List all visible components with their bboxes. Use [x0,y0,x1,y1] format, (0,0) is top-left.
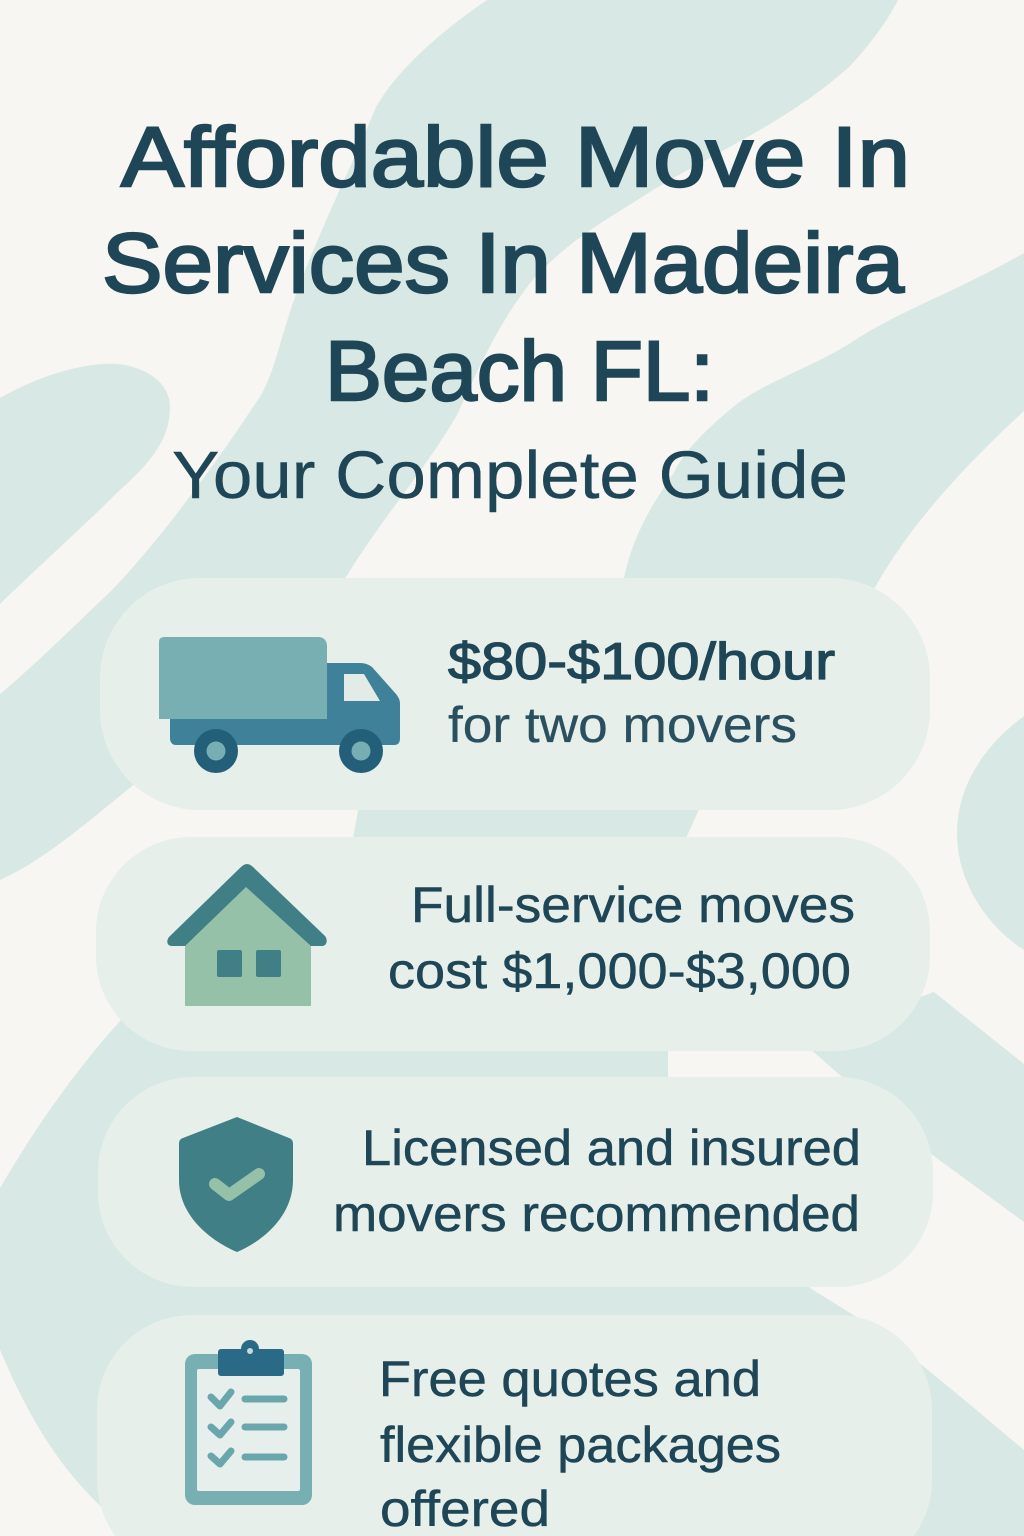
panel: free quotes [97,1315,932,1536]
panel: full-service cost [96,837,930,1051]
rate text [448,633,835,753]
panel: hourly rate [100,578,930,810]
full-service text: cost $1,000-$3,000 [388,943,851,999]
icon: moving truck [159,637,400,773]
licensed text [333,1120,861,1242]
full-service text [388,877,855,999]
title [102,110,910,418]
rate text: $80-$100/hour [448,633,835,691]
licensed text: Licensed and insured [362,1120,861,1176]
licensed text: movers recommended [333,1186,860,1242]
icon: clipboard checklist [185,1340,312,1505]
free quotes text: flexible packages [380,1417,781,1473]
free quotes text: Free quotes and [379,1351,761,1407]
title: Services In Madeira [102,216,904,310]
free quotes text [379,1351,781,1536]
icon: shield with check [179,1117,293,1252]
panel: licensed and insured [98,1077,933,1287]
free quotes text: offered [380,1481,550,1536]
rate text: for two movers [448,697,797,753]
icon: house [167,864,327,1006]
title: Beach FL: [325,324,714,418]
full-service text: Full-service moves [411,877,855,933]
subtitle: Your Complete Guide [172,438,848,513]
title: Affordable Move In [121,110,910,204]
